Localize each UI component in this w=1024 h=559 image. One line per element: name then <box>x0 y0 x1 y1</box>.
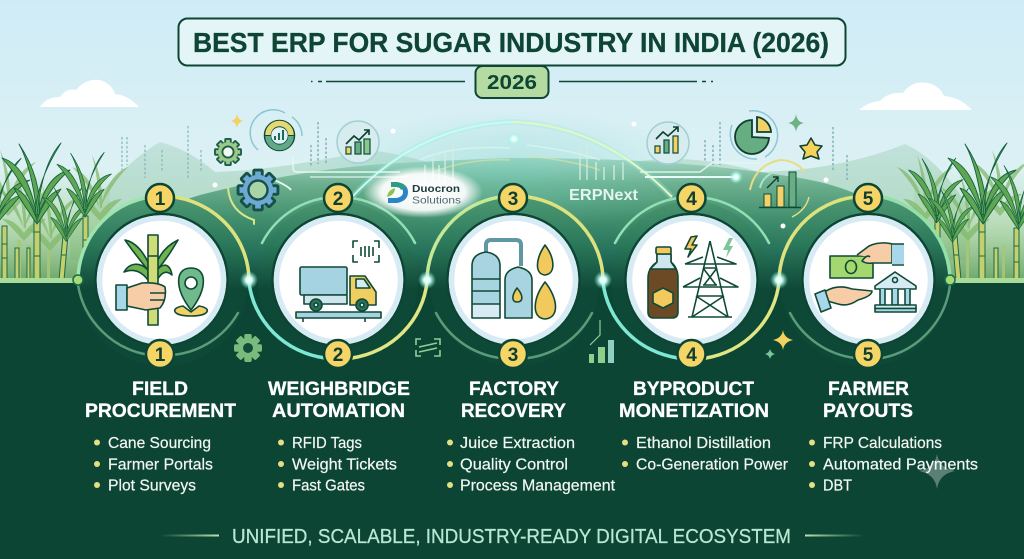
glowing sparkle dots <box>212 122 828 228</box>
bottom number badges: 1 <box>155 345 166 366</box>
bottom number badges: 3 <box>508 345 518 366</box>
step 1 list <box>94 435 213 494</box>
sugarcane left <box>0 143 128 280</box>
step 4 heading <box>619 379 769 422</box>
arcs beside gears <box>228 188 254 224</box>
panel circles <box>96 214 934 346</box>
icon: small sparkle yellow <box>231 114 243 128</box>
circuit lines <box>262 145 760 190</box>
step 3 list: Quality Control <box>460 456 568 474</box>
step 3 heading: FACTORY <box>469 379 559 400</box>
top number badges: 4 <box>686 189 697 210</box>
Duocron Solutions logo: Solutions <box>412 194 461 206</box>
step 4 list <box>622 435 789 474</box>
step 1 heading: FIELD <box>132 379 188 400</box>
icon: lower bar chart <box>589 320 614 363</box>
top number badges: 5 <box>863 189 874 210</box>
icon: large blue gear <box>238 170 278 210</box>
top number badges: 2 <box>333 189 343 210</box>
step 2 list: Weight Tickets <box>292 456 397 474</box>
icon: growth chart badge right <box>647 122 689 164</box>
icon: lower green gear <box>235 335 261 361</box>
step 3 list: Juice Extraction <box>460 435 575 452</box>
icon: factory tanks and juice drops <box>472 240 556 319</box>
mini bar traces <box>424 145 624 183</box>
ring domes <box>78 196 950 366</box>
step 2 heading: AUTOMATION <box>272 401 405 422</box>
step 5 heading: FARMER <box>828 379 909 400</box>
icon: lower sparkles <box>765 330 793 359</box>
icon: small green gear <box>215 139 241 165</box>
step 5 list: DBT <box>823 478 852 494</box>
rolling green midground <box>90 158 950 281</box>
ERPNext label: ERPNext <box>569 187 638 204</box>
step 4 list: Co-Generation Power <box>636 456 789 474</box>
step 4 list: Ethanol Distillation <box>636 435 771 452</box>
step 3 list: Process Management <box>460 478 616 494</box>
inner circle pale rims <box>100 218 930 342</box>
ground strips <box>0 278 1024 283</box>
left cloud <box>40 80 139 107</box>
footer tagline: UNIFIED, SCALABLE, INDUSTRY-READY DIGITAL ECOSYSTEM <box>232 526 791 548</box>
right cloud <box>859 82 972 110</box>
step 3 heading: RECOVERY <box>461 401 566 422</box>
step 5 list <box>809 435 978 494</box>
bottom number badges: 4 <box>686 345 697 366</box>
icon: truck on weighbridge with scanner <box>296 241 381 322</box>
step 5 list: Automated Payments <box>823 456 978 474</box>
step 1 list: Farmer Portals <box>108 456 213 474</box>
bottom number badges <box>146 340 882 368</box>
icon: donut chart <box>250 110 302 150</box>
top number badges: 1 <box>155 189 166 210</box>
bottom number badges: 5 <box>863 345 874 366</box>
step 1 heading <box>85 379 236 422</box>
year pill <box>476 66 548 98</box>
bottom number badges: 2 <box>333 345 343 366</box>
year pill: 2026 <box>487 72 537 94</box>
title <box>178 18 846 66</box>
icon: money, hands and bank <box>815 243 916 312</box>
top number badges: 3 <box>508 189 518 210</box>
step 2 heading: WEIGHBRIDGE <box>268 379 410 400</box>
sky background <box>0 0 1024 285</box>
icon: growth chart badge left <box>337 121 379 163</box>
step 5 list: FRP Calculations <box>823 435 942 452</box>
icon: green sparkle <box>788 114 804 132</box>
icon: pie chart <box>730 111 778 159</box>
bright digital arc <box>352 122 672 197</box>
step 5 heading <box>823 379 913 422</box>
icon: lower scan arrows <box>416 339 440 356</box>
step 2 list: Fast Gates <box>292 478 365 494</box>
step 2 list <box>278 435 397 494</box>
step 1 list: Cane Sourcing <box>108 435 211 452</box>
icon: yellow star <box>800 138 822 159</box>
central teal glow <box>322 110 702 230</box>
dark ground <box>0 281 1024 559</box>
Duocron Solutions logo <box>363 166 483 218</box>
year pill side rules <box>311 80 713 82</box>
icon: rising bars chart <box>750 160 809 217</box>
distant hills <box>70 142 970 260</box>
background data bars right <box>705 122 847 182</box>
sugarcane right <box>897 143 1024 280</box>
title: BEST ERP FOR SUGAR INDUSTRY IN INDIA (2026) <box>193 27 829 58</box>
step 1 heading: PROCUREMENT <box>85 401 236 422</box>
step 5 heading: PAYOUTS <box>823 401 913 422</box>
step 2 heading <box>268 379 410 422</box>
ring junction nodes <box>73 271 955 289</box>
top number badges <box>146 184 882 212</box>
icon: cane and hand with map pin <box>116 235 207 325</box>
icon: ethanol bottle and power tower <box>648 236 738 318</box>
step 3 heading <box>461 379 566 422</box>
Duocron Solutions logo: Duocron <box>412 183 460 195</box>
faint star over list <box>919 454 955 489</box>
step 3 list <box>447 435 616 494</box>
connecting flow rings <box>78 196 950 358</box>
step 4 heading: BYPRODUCT <box>633 379 754 400</box>
background data bars left <box>122 122 326 178</box>
step 1 list: Plot Surveys <box>108 478 196 494</box>
step 4 heading: MONETIZATION <box>619 401 769 422</box>
step 2 list: RFID Tags <box>292 435 362 452</box>
